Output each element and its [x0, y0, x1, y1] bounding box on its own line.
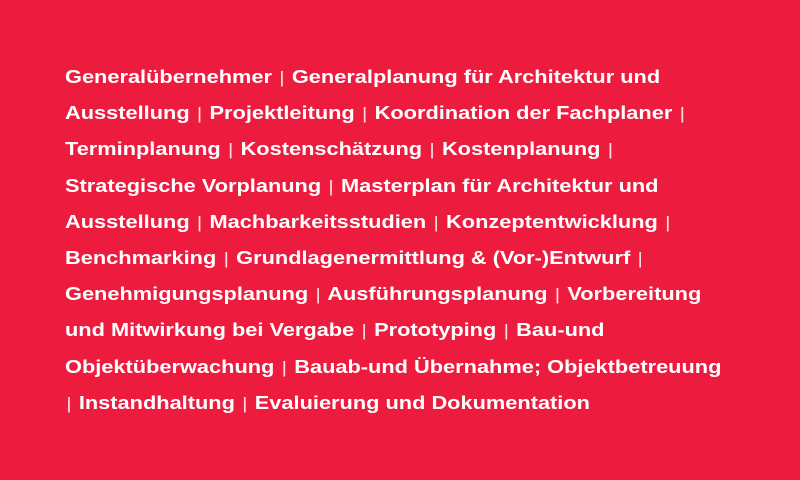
text block: services list: Strategische Vorplanung | Masterplan für Architektur und: [65, 176, 659, 196]
text block: services list: Genehmigungsplanung | Ausführungsplanung | Vorbereitung: [65, 284, 701, 304]
text block: services list: | Instandhaltung | Evaluierung und Dokumentation: [66, 393, 590, 413]
text block: services list: Ausstellung | Projektleitung | Koordination der Fachplaner |: [65, 103, 685, 123]
text block: services list: und Mitwirkung bei Vergabe | Prototyping | Bau-und: [65, 320, 605, 340]
text block: services list: Ausstellung | Machbarkeitsstudien | Konzeptentwicklung |: [65, 212, 670, 232]
text block: services list: Benchmarking | Grundlagenermittlung & (Vor-)Entwurf |: [65, 248, 643, 268]
text block: services list: [65, 67, 721, 413]
text block: services list: Terminplanung | Kostenschätzung | Kostenplanung |: [65, 139, 613, 159]
text block: services list: Objektüberwachung | Bauab-und Übernahme; Objektbetreuung: [65, 356, 721, 376]
text block: services list: Generalübernehmer | Generalplanung für Architektur und: [65, 67, 660, 87]
